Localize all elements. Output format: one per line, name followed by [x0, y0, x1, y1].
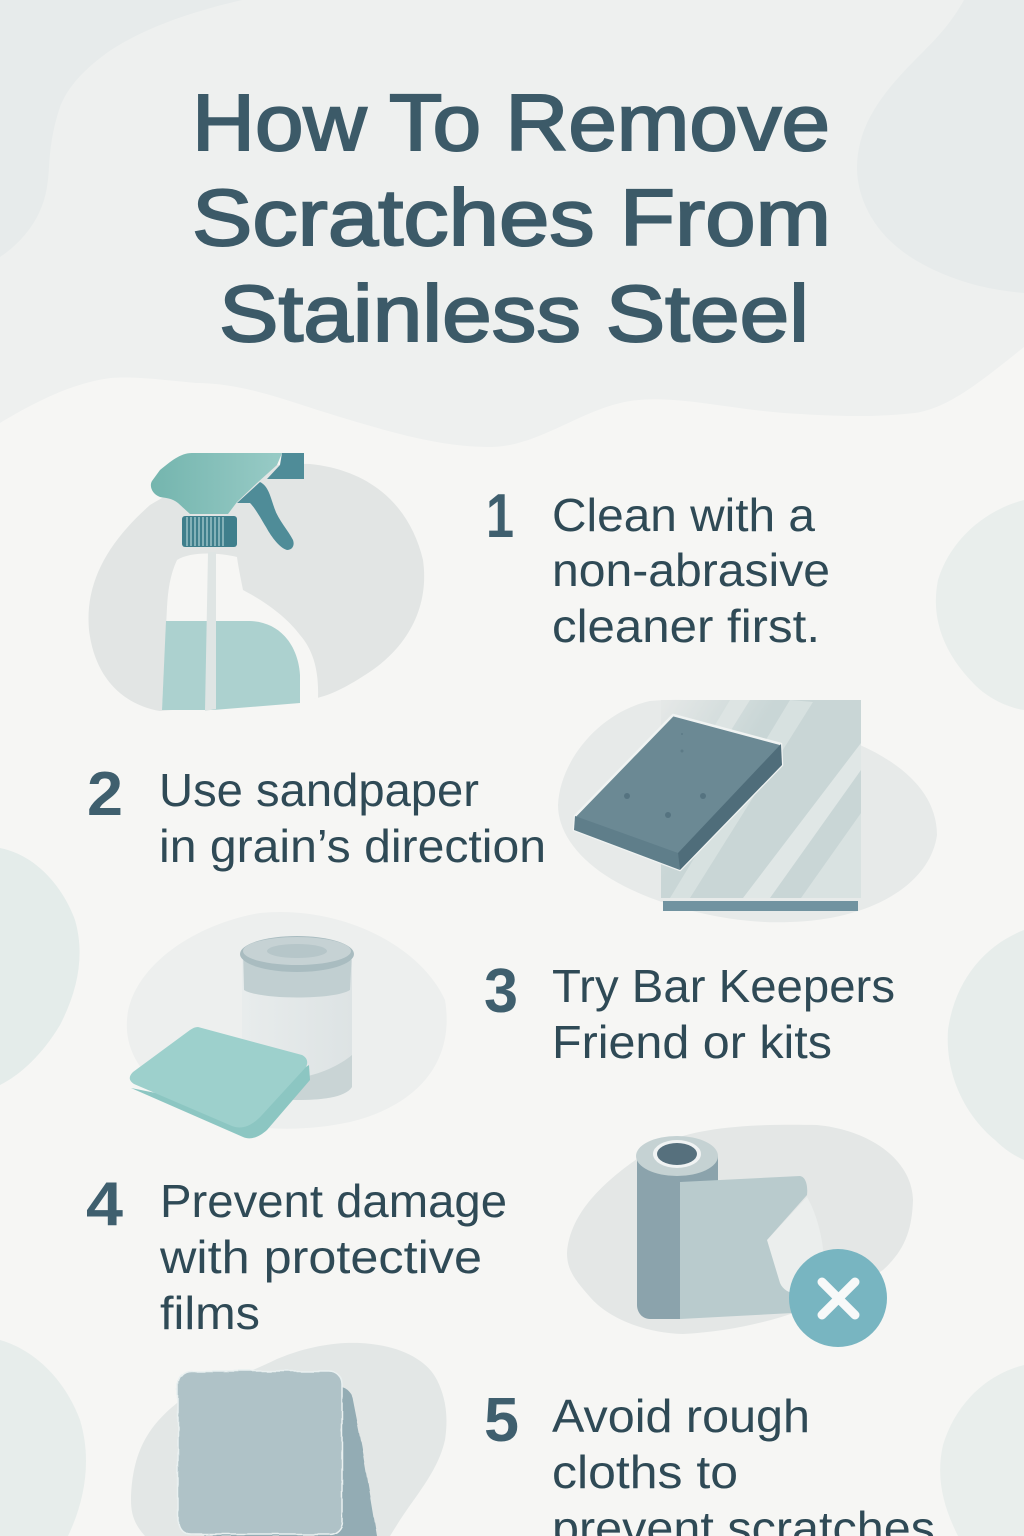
- step 2 text: [159, 764, 546, 872]
- step 1 text: Clean with a: [552, 489, 815, 541]
- step 5 text: Avoid rough: [552, 1390, 810, 1442]
- number 5: 5: [484, 1386, 519, 1455]
- step 2 text: Use sandpaper: [159, 764, 479, 816]
- step 3 text: [552, 960, 895, 1068]
- icon: spray bottle: [89, 453, 424, 711]
- number 2: 2: [87, 760, 123, 829]
- title: Scratches From: [192, 173, 831, 262]
- number 3: 3: [484, 957, 518, 1026]
- title: How To Remove: [192, 78, 830, 167]
- step 4 text: [159, 1175, 507, 1339]
- step 1 text: [552, 489, 830, 652]
- step 3 text: Friend or kits: [552, 1016, 832, 1068]
- step 2 text: in grain’s direction: [159, 820, 546, 872]
- number 1: 1: [486, 482, 514, 551]
- icon: sandpaper block on steel sheet: [558, 700, 937, 922]
- step 4: [86, 1170, 507, 1339]
- step 5: [484, 1386, 935, 1536]
- icon: film roll with X badge: [567, 1125, 913, 1347]
- title: [192, 78, 831, 358]
- step 4 text: with protective: [159, 1231, 482, 1283]
- icon: rough cloths: [131, 1343, 446, 1536]
- step 5 text: [552, 1390, 935, 1536]
- step 2: [87, 760, 546, 872]
- step 3: [484, 957, 895, 1068]
- step 3 text: Try Bar Keepers: [552, 960, 895, 1012]
- step 1 text: cleaner first.: [552, 600, 820, 652]
- step 5 text: cloths to: [552, 1446, 738, 1498]
- step 1: [486, 482, 830, 652]
- number 4: 4: [86, 1170, 124, 1239]
- step 4 text: Prevent damage: [160, 1175, 507, 1227]
- step 1 text: non-abrasive: [552, 544, 830, 596]
- title: Stainless Steel: [219, 269, 809, 358]
- icon: powder can and cloth: [127, 912, 447, 1138]
- step 4 text: films: [160, 1287, 260, 1339]
